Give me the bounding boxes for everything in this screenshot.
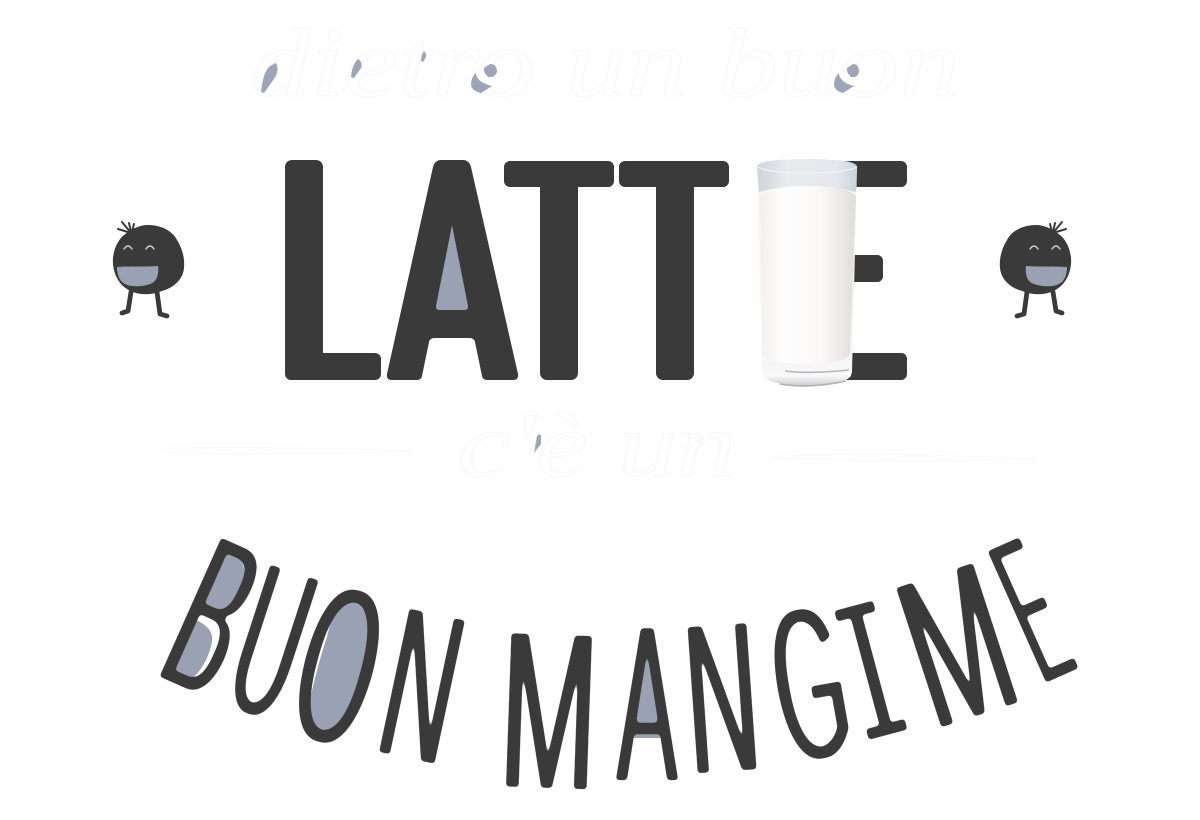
word: BUON: N [363, 558, 482, 813]
headline: BUON MANGIME [133, 488, 1099, 820]
letter T: T [623, 100, 729, 439]
mascot: right character [1000, 222, 1071, 316]
letter L: L [281, 99, 381, 439]
letter E: E [784, 100, 914, 440]
word: MANGIME: G [753, 556, 867, 811]
word: BUON [133, 488, 482, 813]
mascot: left character [113, 222, 184, 316]
word: BUON: O [270, 535, 408, 799]
word: BUON: U [205, 516, 339, 769]
icon: glass of milk [757, 159, 857, 386]
word: MANGIME: M [873, 514, 1041, 777]
word: BUON: B [133, 488, 293, 746]
script subheading: c'è un [166, 394, 1037, 496]
letter A: A [390, 100, 515, 439]
word: MANGIME: E [965, 492, 1099, 729]
script heading: dietro un buon: dietro un buon [250, 10, 960, 118]
script heading colored counters [261, 51, 859, 93]
letter A [386, 160, 518, 380]
word: MANGIME: N [677, 573, 767, 820]
word: MANGIME: I [817, 561, 932, 805]
title: LATTE [285, 160, 907, 380]
script subheading: c'è un: c'è un [458, 394, 736, 496]
word: MANGIME [496, 492, 1099, 820]
letter T: T [507, 100, 613, 439]
